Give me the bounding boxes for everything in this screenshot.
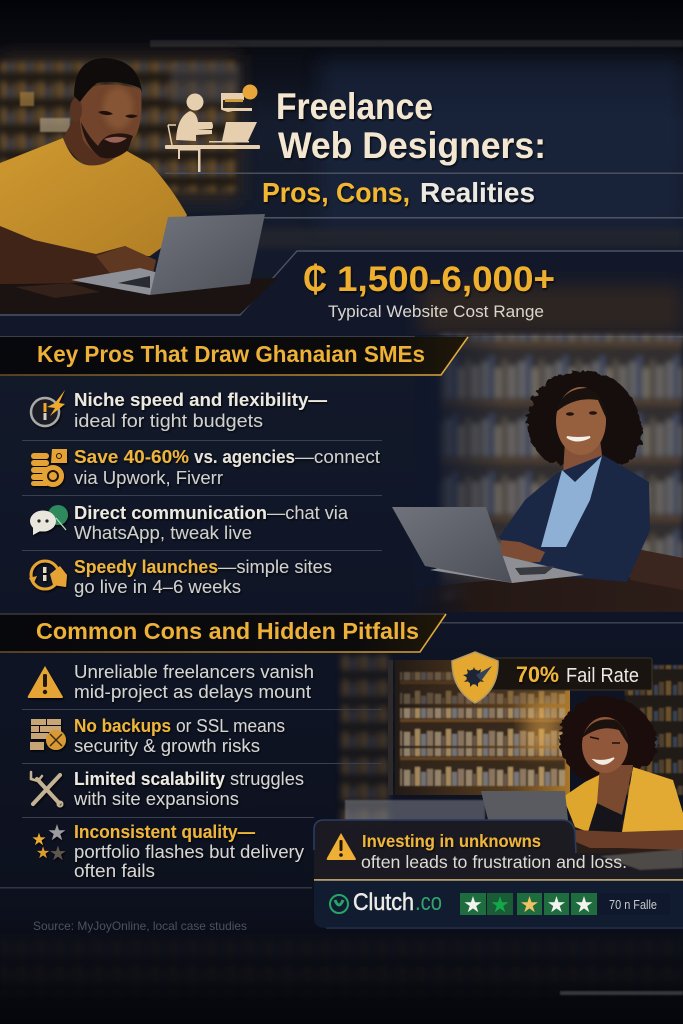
hair <box>527 371 642 468</box>
star rating: ★ <box>520 892 539 917</box>
tablet on table <box>15 283 100 298</box>
item 3: Limited scalability <box>74 769 225 789</box>
cons list <box>0 662 382 888</box>
callout panel: often leads to frustration and loss. <box>361 852 627 872</box>
section heading: pros <box>0 337 468 375</box>
item 2 <box>31 447 380 488</box>
icon: warning <box>28 666 63 698</box>
fail rate badge: 70% <box>516 662 559 687</box>
review strip <box>314 879 683 929</box>
star rating: ★ <box>547 892 566 917</box>
item 4: —simple sites <box>218 557 332 577</box>
item 1: ideal for tight budgets <box>74 411 263 431</box>
item 2: Save 40-60% <box>74 447 189 467</box>
item 1: Unreliable freelancers vanish <box>74 662 314 682</box>
neck and chest <box>597 765 633 815</box>
icon: stars: ★ <box>47 820 67 845</box>
section heading: pros: Key Pros That Draw Ghanaian SMEs <box>37 341 425 367</box>
item 4 <box>31 820 304 881</box>
star rating: ★ <box>490 892 510 917</box>
Clutch logo icon <box>330 895 348 913</box>
icon: clock with bolt <box>31 390 65 426</box>
hair <box>559 696 658 781</box>
icon: broken wall <box>30 719 66 750</box>
title <box>262 86 546 208</box>
icon: shield <box>452 652 498 703</box>
item 2 <box>30 716 285 756</box>
neck <box>563 440 603 500</box>
hands <box>501 540 545 563</box>
item 2: No backups <box>74 716 171 736</box>
blazer <box>563 773 622 832</box>
section heading: cons: Common Cons and Hidden Pitfalls <box>36 618 419 644</box>
section heading: cons <box>0 614 683 652</box>
callout panel <box>314 820 683 880</box>
item 2: security & growth risks <box>74 736 260 756</box>
icon: stars: ★ <box>36 845 50 862</box>
price figure: ₵ <box>303 258 327 299</box>
item 1 <box>28 662 314 702</box>
item 1: mid-project as delays mount <box>74 682 311 702</box>
blazer <box>499 455 650 582</box>
star rating: ★ <box>574 892 594 917</box>
callout text: Investing in unknowns <box>362 831 541 851</box>
right shelves behind pros <box>415 335 683 605</box>
item 2: —connect <box>295 447 380 467</box>
face <box>556 387 606 455</box>
laptop <box>430 555 584 583</box>
table <box>405 577 683 612</box>
chair <box>630 548 683 590</box>
price caption: Typical Website Cost Range <box>328 302 544 321</box>
item 4 <box>29 557 332 597</box>
eyes and mouth <box>98 111 138 118</box>
item 3: with site expansions <box>73 789 239 809</box>
rating label <box>598 893 670 915</box>
table <box>480 820 683 880</box>
item 3: struggles <box>230 769 304 789</box>
item 4: go live in 4–6 weeks <box>74 577 241 597</box>
item 4: Speedy launches <box>74 557 218 577</box>
hair <box>74 58 142 102</box>
item 2: via Upwork, Fiverr <box>74 468 223 488</box>
title: Web Designers: <box>278 125 546 166</box>
Clutch wordmark: Clutch <box>353 889 414 916</box>
item 1 <box>31 390 327 431</box>
price figure: 1,500-6,000+ <box>337 260 555 299</box>
header rule lines <box>165 172 683 218</box>
item 3: WhatsApp, tweak live <box>74 523 252 543</box>
header photo backdrop: blurred shop shelves <box>0 55 683 248</box>
shirt <box>0 138 187 256</box>
source note: Source: MyJoyOnline, local case studies <box>33 919 247 933</box>
icon: stars: ★ <box>49 843 67 865</box>
pros list <box>22 390 382 597</box>
icon: chat bubbles <box>30 505 68 535</box>
rating label: 70 n Falle <box>609 898 657 912</box>
star rating: ★ <box>463 892 483 917</box>
black top <box>588 803 622 832</box>
title icon: freelancer at desk <box>165 84 260 172</box>
price panel <box>0 251 683 338</box>
face <box>79 84 142 159</box>
item 3: —chat via <box>267 503 349 523</box>
subtitle: Pros, Cons, <box>262 177 410 208</box>
title: Freelance <box>276 86 433 127</box>
icon: rocket clock <box>29 561 67 589</box>
icon: stars <box>31 820 67 865</box>
icon: stars: ★ <box>31 830 47 849</box>
item 3 <box>31 769 304 809</box>
shirt <box>541 456 602 547</box>
arm <box>0 226 156 284</box>
item 2: vs. agencies <box>194 447 295 467</box>
laptop <box>481 791 568 820</box>
item 4: Inconsistent quality— <box>74 822 255 842</box>
neck <box>63 115 128 165</box>
woman in navy blazer <box>392 371 683 612</box>
Clutch wordmark: .co <box>415 889 442 916</box>
icon: coins <box>31 449 67 487</box>
item 3: Direct communication <box>74 503 267 523</box>
arms <box>575 830 683 850</box>
subtitle: Realities <box>420 177 535 208</box>
man with laptop <box>0 58 278 314</box>
item 4: portfolio flashes but delivery <box>74 842 304 862</box>
fail rate badge: Fail Rate <box>566 665 639 687</box>
item 3 <box>30 503 349 543</box>
icon: wrench and screwdriver <box>31 772 62 806</box>
lower shelves and woman in yellow blazer <box>340 655 683 880</box>
star rating <box>460 892 597 917</box>
item 2: or SSL means <box>176 716 285 736</box>
fail rate badge <box>452 652 652 703</box>
item 1: Niche speed and flexibility— <box>74 390 327 410</box>
ear <box>70 98 82 122</box>
icon: warning <box>327 833 356 860</box>
beard <box>81 122 133 158</box>
item 4: often fails <box>74 861 155 881</box>
laptop <box>71 268 170 295</box>
face <box>582 717 628 773</box>
table <box>0 278 278 314</box>
